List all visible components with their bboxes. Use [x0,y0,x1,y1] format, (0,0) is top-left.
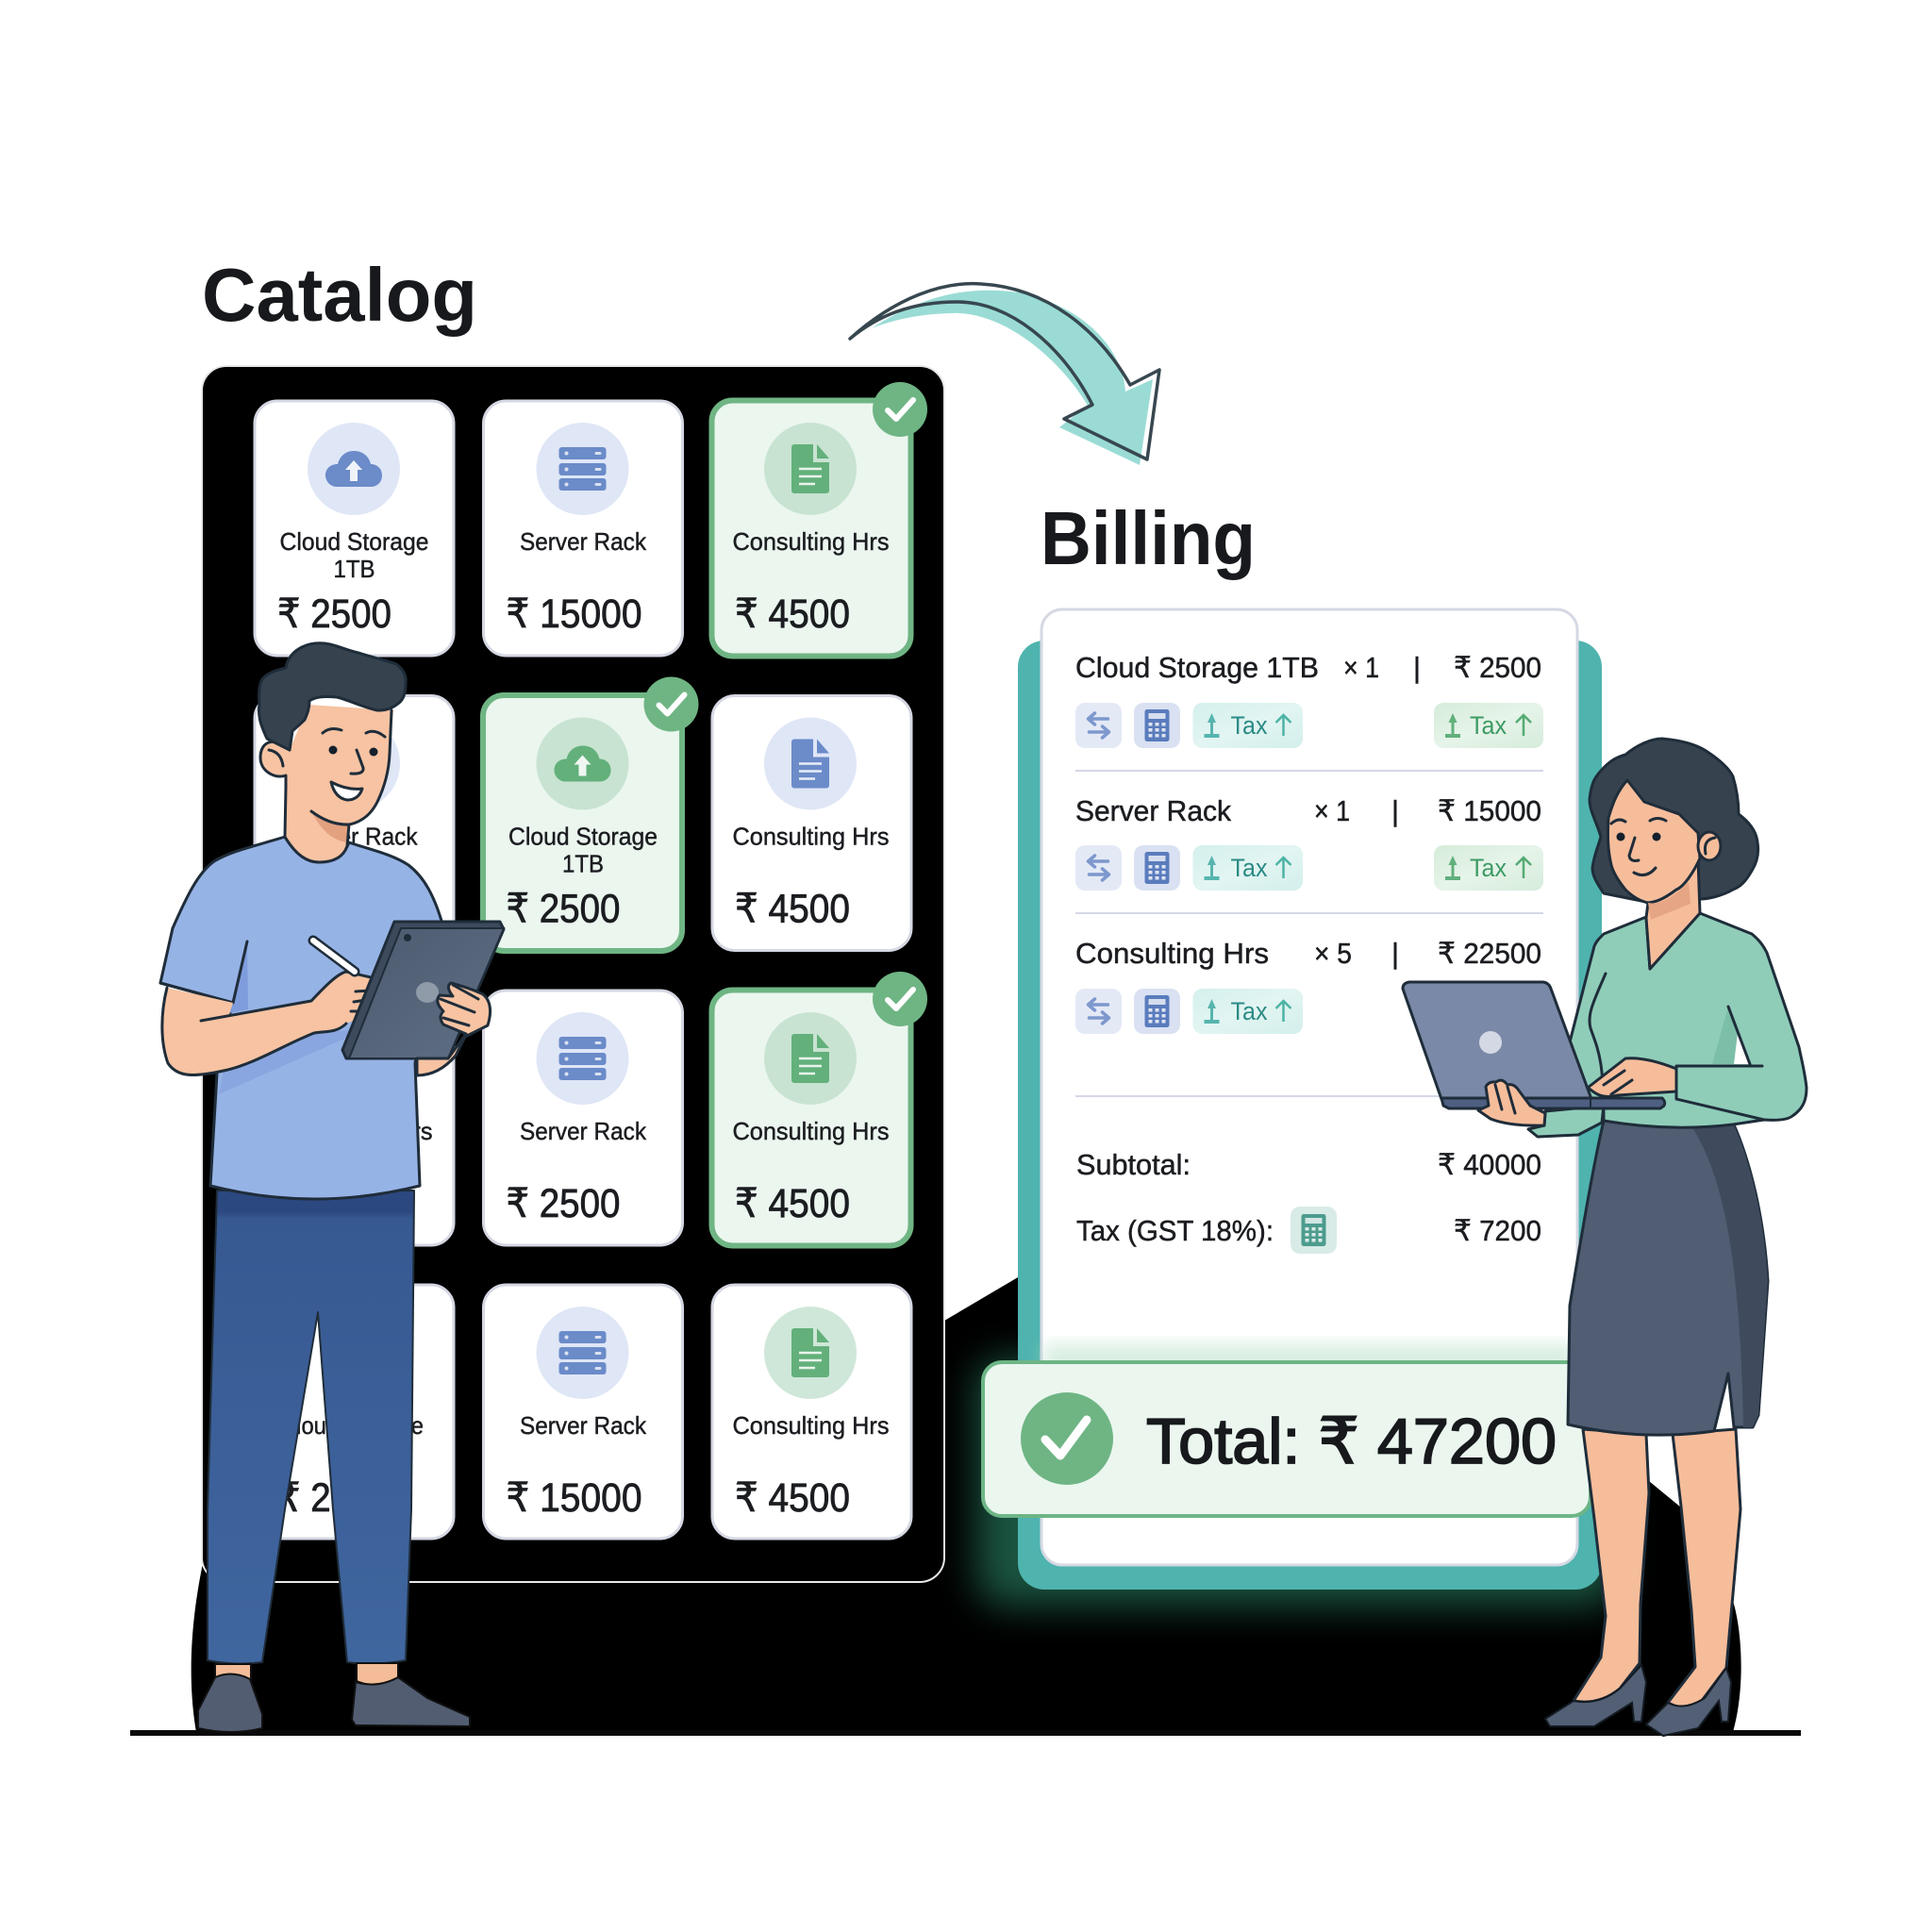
tablet [342,922,504,1058]
card: consulting hours row 4: Consulting Hrs [732,1411,889,1440]
card: cloud storage row 2 selected [483,677,698,951]
left ankle and shoe [198,1664,262,1732]
hand on keyboard [1588,1058,1676,1096]
card: cloud storage row 2 selected: ₹ 2500 [506,887,621,932]
line item: server rack: Tax [1470,854,1507,882]
card: server rack row 2: Server Rack [291,823,418,851]
card: server rack row 3: ₹ 2500 [506,1181,621,1226]
card: consulting hours row 2: ₹ 4500 [735,887,850,932]
card: consulting hours row 4: ₹ 4500 [735,1475,850,1521]
card: server rack row 1 [483,401,683,656]
card: consulting hours row 3 selected [711,972,927,1245]
arrow: catalog to billing [850,284,1159,465]
shirt [160,837,441,1199]
card: consulting hours row 3: Consulting Hrs [275,1117,432,1145]
card: consulting hours row 3 selected: ₹ 4500 [735,1181,850,1226]
subtotal row: Subtotal: [1076,1148,1191,1181]
line item: cloud storage: | [1413,651,1421,684]
card: server rack row 3: Server Rack [520,1117,647,1145]
card: cloud storage row 4: ₹ 2500 [277,1475,391,1521]
line item: cloud storage [1075,651,1543,748]
line item: consulting hours: × 5 [1314,937,1352,970]
line item: server rack: | [1391,794,1399,827]
card: cloud storage row 1: Cloud Storage [279,527,428,556]
left cuff [1528,1106,1604,1137]
hair [258,643,406,750]
line item: consulting hours: Consulting Hrs [1075,937,1269,970]
card: consulting hours row 2 [712,696,911,951]
sweater [1528,913,1807,1137]
legs [1574,1429,1649,1702]
right heel shoe [1646,1668,1731,1736]
arm and writing hand [162,972,371,1075]
line item: consulting hours: Tax [1230,997,1268,1025]
card: consulting hours row 2: Consulting Hrs [732,823,889,851]
card: cloud storage row 1: ₹ 2500 [277,591,391,637]
hand under laptop [1478,1080,1545,1125]
card: cloud storage row 1: 1TB [334,555,375,583]
person: woman with laptop [1403,739,1807,1736]
right hand [417,983,491,1075]
line item: cloud storage: Cloud Storage 1TB [1075,651,1319,684]
card: consulting hours row 1 selected: ₹ 4500 [735,591,850,637]
line item: cloud storage: ₹ 2500 [1454,651,1541,684]
card: server rack row 4: Server Rack [520,1411,647,1440]
card: server rack row 4 [483,1285,683,1539]
invoice sheet [1041,609,1577,1565]
line item: server rack: ₹ 15000 [1438,794,1541,827]
line item: cloud storage: × 1 [1343,651,1379,684]
card: cloud storage row 4: Cloud Storage [280,1411,424,1440]
subtotal row [1076,1148,1541,1181]
line item: cloud storage: Tax [1230,711,1268,740]
teal back plate [1018,641,1602,1590]
line item: consulting hours [1075,937,1541,1034]
card: cloud storage row 1 [255,401,454,656]
subtotal row: ₹ 40000 [1438,1148,1541,1181]
line item: consulting hours: ₹ 22500 [1438,937,1541,970]
neck and head [258,643,406,862]
skirt [1568,1121,1768,1435]
card: server rack row 1: Server Rack [520,527,647,556]
face [1607,780,1721,920]
card: consulting hours row 4 [712,1285,911,1539]
stylus [313,941,355,972]
card: server rack row 3 [483,991,683,1245]
card: consulting hours row 1 selected: Consulting Hrs [732,527,889,556]
heading: Billing: Billing [1041,496,1256,580]
line item: cloud storage: Tax [1470,711,1507,740]
card: cloud storage row 4 [255,1285,454,1539]
card: server rack row 4: ₹ 15000 [506,1475,641,1521]
card: server rack row 1: ₹ 15000 [506,591,641,637]
total bar [983,1362,1591,1516]
left heel shoe [1545,1665,1646,1726]
panel: catalog [202,366,944,1582]
laptop [1403,982,1665,1108]
line item: consulting hours: | [1391,937,1399,970]
green glow on backdrop [976,1358,1618,1606]
hair back [1590,739,1758,903]
right ankle and shoe [352,1663,470,1726]
card: cloud storage row 2 selected: Cloud Storage [508,823,658,851]
eyes [328,745,338,755]
card: consulting hours row 3 [255,991,454,1245]
soft glow on sheet [1043,1344,1575,1373]
card: consulting hours row 3 selected: Consulting Hrs [732,1117,889,1145]
panel: billing [983,609,1602,1590]
line item: server rack [1075,794,1543,891]
line item: server rack: Tax [1230,854,1268,882]
tax row: ₹ 7200 [1454,1214,1541,1247]
ground line [130,1730,1801,1736]
trousers [208,1191,414,1664]
line item: server rack: Server Rack [1075,794,1231,827]
neck [1646,858,1700,969]
total bar: Total: ₹ 47200 [1146,1406,1557,1477]
card: consulting hours row 1 selected [711,382,927,657]
line item: server rack: × 1 [1314,794,1350,827]
mouth [331,782,362,800]
black backdrop shape [192,1277,1741,1732]
person: man with tablet [160,643,504,1732]
card: server rack row 2 [255,696,454,951]
heading: Catalog: Catalog [202,253,477,337]
card: cloud storage row 2 selected: 1TB [562,849,604,877]
tax row: Tax (GST 18%): [1076,1214,1274,1247]
tax row [1076,1207,1541,1254]
